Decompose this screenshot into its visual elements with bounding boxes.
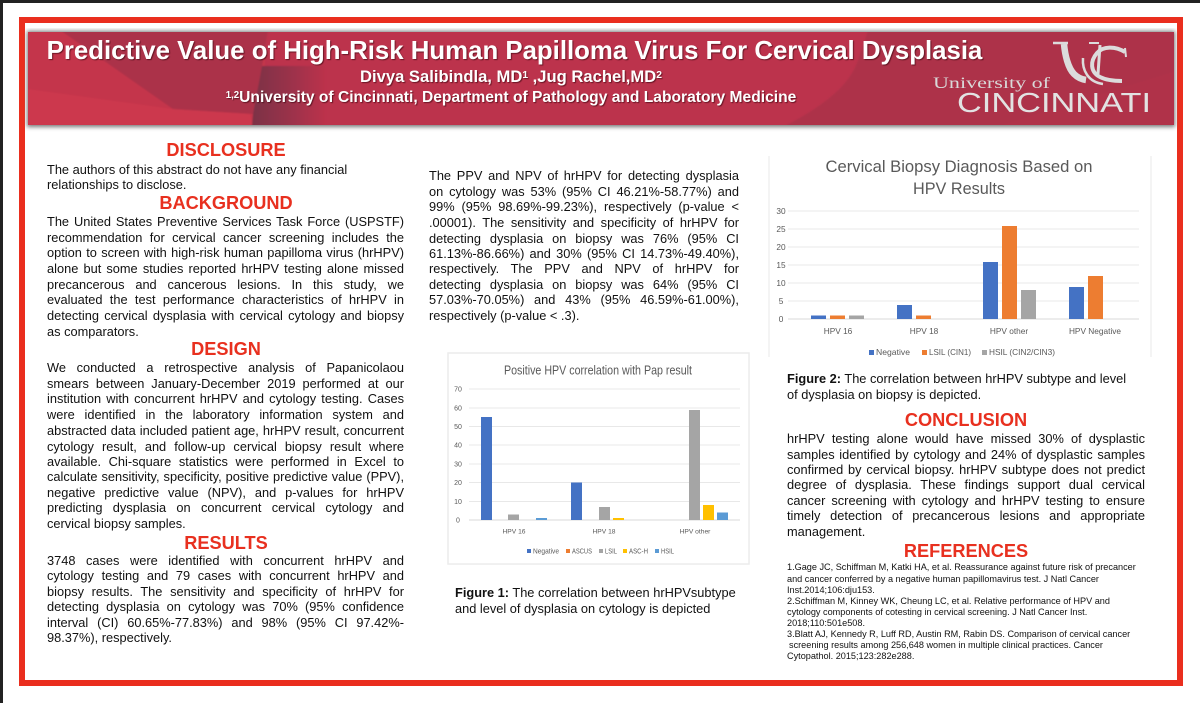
heading: design: DESIGN	[191, 339, 261, 359]
text: results continued: detecting dysplasia on biopsy was 76% (95% CI	[429, 231, 739, 246]
text: conclusion: timely detection of precancerous lesions and appropriate	[787, 508, 1145, 523]
y axis labels: 30	[776, 206, 786, 216]
text: background	[47, 214, 404, 339]
text: results continued: .00001). The sensitivity and specificity of hrHPV for	[429, 215, 739, 230]
banner	[24, 28, 1178, 130]
text: design	[47, 360, 404, 531]
y axis labels: 15	[776, 260, 786, 270]
text: results continued: respectively. The PPV and NPV of hrHPV for	[429, 261, 739, 276]
caption: figure 2: of dysplasia on biopsy is depicted.	[787, 387, 981, 402]
y axis labels: 50	[454, 424, 462, 431]
screen edge left	[0, 0, 3, 703]
text: background: alone but some studies reported hrHPV testing alone missed	[47, 261, 404, 276]
text: background: as comparators.	[47, 324, 139, 339]
text: background: The United States Preventive Services Task Force (USPSTF)	[47, 214, 404, 229]
text: design: cytology result, and follow-up cervical biopsy result where	[47, 439, 404, 454]
y axis labels: 5	[779, 296, 784, 306]
legend	[527, 548, 674, 556]
chart title: Cervical Biopsy Diagnosis Based on	[826, 157, 1092, 176]
affiliation: 1,2University of Cincinnati, Department of Pathology and Laboratory Medicine	[226, 89, 796, 106]
category labels: HPV 16	[824, 326, 853, 336]
text: results: interval (CI) 60.65%-77.83%) and 98% (95% CI 97.42%-	[47, 615, 404, 630]
chart: cervical biopsy diagnosis based on HPV results: HPV Results	[913, 179, 1005, 198]
text: background: detecting cervical dysplasia with cervical cytology and biopsy	[47, 308, 404, 323]
text: disclosure	[47, 162, 347, 192]
text: results: 98.37%), respectively.	[47, 630, 172, 645]
text: results continued: 61.13%-86.66%) and 30% (95% CI 14.73%-49.40%),	[429, 246, 739, 261]
caption: figure 1	[455, 585, 736, 616]
bars	[811, 226, 1103, 319]
legend	[869, 347, 1055, 357]
legend: ASC-H	[629, 548, 648, 556]
text: conclusion: hrHPV testing alone would have missed 30% of dysplastic	[787, 431, 1145, 446]
text: references: 1.Gage JC, Schiffman M, Katki HA, et al. Reassurance against future risk of precancer	[787, 562, 1136, 572]
text: results: cytology testing and 79 cases with concurrent hrHPV and	[47, 568, 404, 583]
legend: HSIL	[661, 548, 674, 556]
authors: Divya Salibindla, MD1 ,Jug Rachel,MD2	[360, 67, 662, 86]
y axis labels: 20	[776, 242, 786, 252]
text: results continued: 57.03%-70.05%) and 43% (95% 46.59%-61.00%),	[429, 292, 739, 307]
text: design: We conducted a retrospective analysis of Papanicolaou	[47, 360, 404, 375]
category labels: HPV 16	[502, 528, 526, 536]
y axis labels: 70	[454, 386, 462, 394]
text: background: recommendation for cervical cancer screening includes the	[47, 230, 404, 245]
text: background: evaluated the test performance characteristics of hrHPV in	[47, 292, 404, 307]
text: references: 3.Blatt AJ, Kennedy R, Luff RD, Austin RM, Rabin DS. Comparison of cervical cancer	[787, 629, 1130, 639]
y axis labels: 0	[456, 518, 460, 524]
text: conclusion: degree of dysplasia. These findings support dual cervical	[787, 477, 1145, 492]
legend: LSIL (CIN1)	[929, 347, 971, 357]
category labels: HPV Negative	[1069, 326, 1121, 336]
text: design: cervical biopsy samples.	[47, 516, 186, 531]
chart: cervical biopsy diagnosis based on HPV results	[768, 156, 1152, 357]
text: design: predicting dysplasia on concurrent cervical cytology and	[47, 500, 404, 515]
bars	[481, 410, 728, 520]
text: University of: University of	[933, 75, 1051, 92]
text: design: available. Chi-square statistics were performed in Excel to	[47, 454, 404, 469]
text: references: 2018;110:501e508.	[787, 618, 865, 628]
title: Predictive Value of High-Risk Human Papilloma Virus For Cervical Dysplasia	[47, 37, 982, 65]
heading: results: RESULTS	[184, 533, 268, 553]
text: disclosure: The authors of this abstract do not have any financial	[47, 162, 347, 177]
caption: figure 1: Figure 1: The correlation between hrHPVsubtype	[455, 585, 736, 600]
heading: conclusion: CONCLUSION	[905, 410, 1027, 430]
text: design: institution with concurrent hrHPV and cytology testing. Cases	[47, 391, 404, 406]
logo: University of Cincinnati	[933, 42, 1151, 118]
text: results continued: The PPV and NPV of hrHPV for detecting dysplasia	[429, 168, 739, 183]
text: references	[787, 562, 1136, 661]
y axis labels: 30	[454, 462, 462, 468]
text: references: cytology components of cotesting in cervical screening. J Natl Cancer Inst.	[787, 607, 1087, 617]
text: results	[47, 553, 404, 645]
text: results continued: respectively (p-value < .3).	[429, 308, 579, 323]
text: disclosure: relationships to disclose.	[47, 177, 186, 192]
legend: Negative	[533, 548, 559, 556]
text: conclusion: samples identified by cytology and 24% of dysplastic samples	[787, 447, 1145, 462]
category labels: HPV 18	[592, 528, 616, 536]
category labels	[824, 326, 1121, 336]
category labels: HPV 18	[910, 326, 939, 336]
chart: positive HPV correlation with Pap result	[447, 352, 750, 565]
legend: LSIL	[605, 548, 617, 556]
text: results continued: on cytology was 53% (95% CI 46.21%-58.77%) and	[429, 184, 739, 199]
text: results: biopsy results. The sensitivity and specificity of hrHPV for	[47, 584, 404, 599]
banner background	[24, 28, 1178, 130]
text: design: abstracted data included patient age, hrHPV result, concurrent	[47, 423, 404, 438]
y axis labels	[454, 386, 462, 524]
text: conclusion: management.	[787, 524, 865, 539]
category labels: HPV other	[990, 326, 1028, 336]
text: results: detecting dysplasia on cytology was 70% (95% confidence	[47, 599, 404, 614]
text: results continued: 99% (95% 98.69%-99.23%), respectively (p-value <	[429, 199, 739, 214]
text: results continued	[429, 168, 739, 323]
heading: background: BACKGROUND	[159, 193, 293, 213]
text: design: were identified in the laboratory information system and	[47, 407, 404, 422]
text: references: screening results among 256,648 women in multiple clinical practices. Cancer	[789, 640, 1103, 650]
text: design: smears between January-December 2019 performed at our	[47, 376, 404, 391]
icon: UC monogram	[1053, 43, 1126, 84]
y axis labels	[776, 206, 786, 324]
text: references: 2.Schiffman M, Kinney WK, Cheung LC, et al. Relative performance of HPV and	[787, 596, 1110, 606]
caption: figure 1: and level of dysplasia on cytology is depicted	[455, 601, 710, 616]
legend: HSIL (CIN2/CIN3)	[989, 347, 1055, 357]
text: background: option to screen with high-risk human papilloma virus (hrHPV)	[47, 245, 404, 260]
y axis labels: 60	[454, 406, 462, 412]
y axis labels: 25	[776, 224, 786, 234]
y axis labels: 0	[779, 314, 784, 324]
text: references: Inst.2014;106:dju153.	[787, 585, 875, 595]
heading: references: REFERENCES	[904, 541, 1028, 561]
category labels	[502, 528, 711, 536]
text: conclusion: cancer screening with cytology and hrHPV testing to ensure	[787, 493, 1145, 508]
caption: figure 2: Figure 2: The correlation between hrHPV subtype and level	[787, 371, 1126, 386]
legend: Negative	[876, 347, 910, 357]
text: results: 3748 cases were identified with concurrent hrHPV and	[47, 553, 404, 568]
y axis labels: 10	[776, 278, 786, 288]
text: design: calculate sensitivity, specificity, positive predictive value (PPV),	[47, 469, 404, 484]
text: CINCINNATI: CINCINNATI	[957, 87, 1151, 118]
y axis labels: 20	[454, 480, 462, 487]
heading: disclosure: DISCLOSURE	[166, 140, 286, 160]
text: design: negative predictive value (NPV), and p-values for hrHPV	[47, 485, 404, 500]
text: references: Cytopathol. 2015;123:282e288.	[787, 651, 914, 661]
chart title: Positive HPV correlation with Pap result	[504, 364, 692, 378]
text: results continued: detecting dysplasia on biopsy was 64% (95% CI	[429, 277, 739, 292]
screen edge top	[0, 0, 1200, 3]
category labels: HPV other	[680, 528, 711, 536]
y axis labels: 40	[454, 442, 462, 450]
text: conclusion: confirmed by cervical biopsy. hrHPV subtype does not predict	[787, 462, 1145, 477]
caption: figure 2	[787, 371, 1126, 402]
text: references: and cancer conferred by a negative human papillomavirus test. J Natl Cancer	[787, 574, 1099, 584]
y axis labels: 10	[454, 499, 462, 506]
text: conclusion	[787, 431, 1145, 539]
legend: ASCUS	[572, 548, 592, 556]
text: background: precancerous and cancerous lesions. In this study, we	[47, 277, 404, 292]
